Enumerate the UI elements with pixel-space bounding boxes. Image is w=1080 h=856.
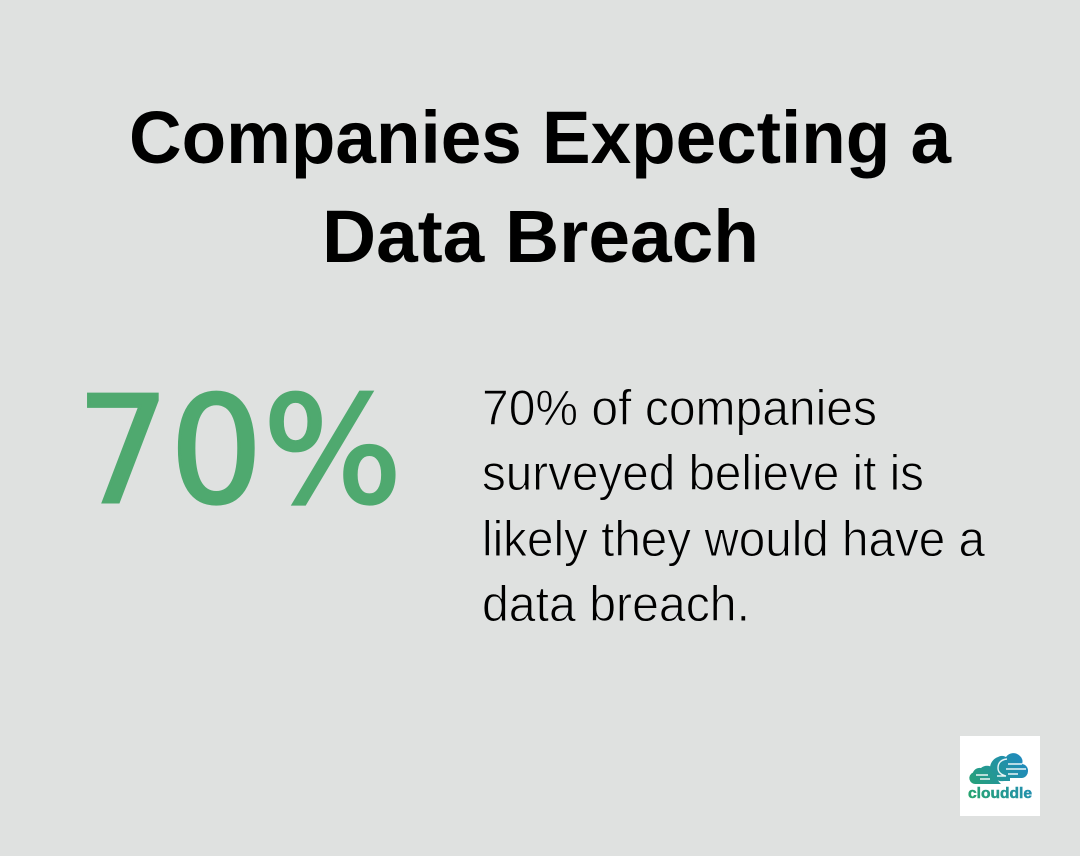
logo: clouddle bbox=[960, 736, 1040, 816]
description text: data breach. bbox=[482, 576, 750, 632]
description text: surveyed believe it is bbox=[482, 445, 924, 501]
description text: 70% of companies bbox=[482, 380, 877, 436]
icon: cloud right bbox=[990, 753, 1028, 781]
title: Companies Expecting a bbox=[129, 96, 952, 179]
big stat: 70%: 70% bbox=[76, 364, 402, 537]
description text: likely they would have a bbox=[482, 511, 985, 567]
title: Data Breach bbox=[322, 195, 759, 278]
icon: cloud left bbox=[969, 766, 1001, 784]
icon: white gap and circuit lines bbox=[976, 759, 1026, 779]
title bbox=[129, 96, 952, 278]
logo wordmark: clouddle bbox=[968, 785, 1032, 802]
description text bbox=[482, 380, 985, 632]
